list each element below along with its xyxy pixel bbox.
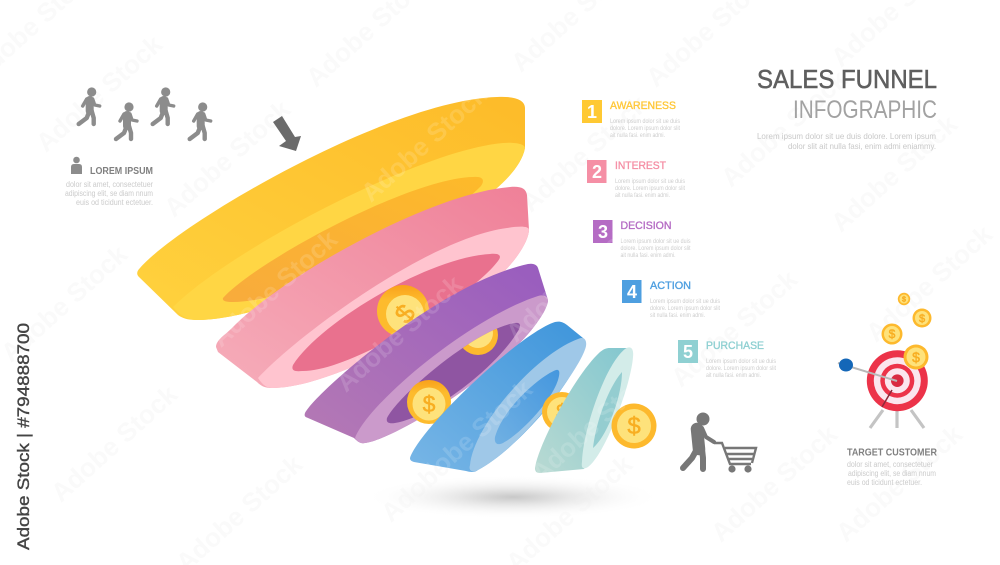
block: lorem ipsum <box>65 157 153 207</box>
title description: dolor slit ait nulla fasi, enim admi eniammy. <box>788 141 936 151</box>
title description <box>757 131 936 151</box>
step 3: decision <box>593 220 691 259</box>
step 5: purchase: ait nulla fasi. enim admi. <box>706 373 761 379</box>
coin 4: $ <box>912 349 920 365</box>
text: lorem ipsum description: adipiscing elit, se diam nnum <box>65 189 153 198</box>
coin in purple layer <box>462 328 498 355</box>
step 1: awareness: AWARENESS <box>610 100 676 112</box>
coin 3: $ <box>889 327 896 341</box>
step 4: action: sit nulla fasi. enim admi. <box>650 313 705 319</box>
title <box>757 64 937 124</box>
walker 4 <box>190 102 211 139</box>
step 5: purchase: Lorem ipsum dolor sit ue duis <box>706 359 776 365</box>
watermark on the white background: Adobe Stock <box>830 419 968 548</box>
step 3: decision: DECISION <box>620 220 672 232</box>
coin between purple and blue <box>407 380 451 424</box>
step 5: purchase: PURCHASE <box>706 340 764 352</box>
coin in pink layer: $ <box>389 299 421 329</box>
step 2: interest: 2 <box>592 162 602 182</box>
walker 1 <box>79 87 100 124</box>
watermark over the funnel: Adobe Stock <box>500 219 638 348</box>
block: target customer: dolor sit amet, consectetuer <box>847 460 933 469</box>
walker 3 <box>153 87 174 124</box>
watermark over the funnel: Adobe Stock <box>525 359 663 488</box>
step 4: action <box>622 280 720 319</box>
step 3: decision: Lorem ipsum dolor sit ue duis <box>620 239 690 245</box>
funnel layer 4: blue <box>410 322 586 472</box>
step 1: awareness: ait nulla fasi. enim admi. <box>610 133 665 139</box>
funnel <box>137 97 657 473</box>
step 3: decision: dolore. Lorem ipsum dolor slit <box>620 246 691 252</box>
title: INFOGRAPHIC <box>793 96 937 124</box>
text: lorem ipsum description: euis od ticidunt ectetuer. <box>76 198 153 207</box>
step 2: interest: INTEREST <box>615 160 666 172</box>
arrow into funnel <box>273 116 301 151</box>
watermark over the funnel: Adobe Stock <box>205 224 343 353</box>
step 4: action: Lorem ipsum dolor sit ue duis <box>650 299 720 305</box>
step 1: awareness <box>582 100 680 139</box>
coin 1: $ <box>902 296 906 304</box>
funnel layer 3: purple <box>305 264 548 443</box>
step 3: decision: 3 <box>598 222 608 242</box>
coin 2: $ <box>919 313 925 325</box>
title description: Lorem ipsum dolor sit ue duis dolore. Lorem ipsum <box>757 131 936 141</box>
icons: walking people <box>79 87 211 139</box>
watermark on the white background: Adobe Stock <box>860 219 998 348</box>
icon: person pushing shopping cart <box>683 412 756 473</box>
icon: target with dart and coins <box>838 293 932 428</box>
watermark over the funnel <box>205 79 663 503</box>
step 3: decision: ait nulla fasi. enim admi. <box>620 253 676 259</box>
block: target customer: TARGET CUSTOMER <box>847 448 938 458</box>
coin in pink layer <box>377 285 429 337</box>
watermark on the white background: Adobe Stock <box>375 399 513 528</box>
coin at funnel exit: $ <box>627 413 641 440</box>
block: target customer <box>847 448 938 487</box>
coin between blue and teal: $ <box>556 401 568 424</box>
watermark on the white background: Adobe Stock <box>158 94 296 223</box>
coin at funnel exit <box>612 404 656 448</box>
vertical stock id: Adobe Stock | #794888700 <box>14 323 33 550</box>
step 1: awareness: Lorem ipsum dolor sit ue duis <box>610 119 680 125</box>
block: target customer: adipiscing elit, se diam nnum <box>848 469 936 478</box>
watermark over the funnel: Adobe Stock <box>400 374 538 503</box>
ground shadow <box>363 475 663 519</box>
watermark on the white background: Adobe Stock <box>665 264 803 393</box>
step 5: purchase <box>678 340 776 379</box>
text: lorem ipsum description: dolor sit amet, consectetuer <box>66 180 153 189</box>
step 2: interest: ait nulla fasi. enim admi. <box>615 193 670 199</box>
watermark over the funnel: Adobe Stock <box>355 79 493 208</box>
step 4: action: ACTION <box>650 280 691 292</box>
watermark on the white background: Adobe Stock <box>715 64 853 193</box>
step 1: awareness: 1 <box>587 102 597 122</box>
heading: lorem ipsum: LOREM IPSUM <box>90 165 153 177</box>
coin between purple and blue: $ <box>423 391 436 417</box>
step 1: awareness: dolore. Lorem ipsum dolor slit <box>610 126 680 132</box>
block: target customer: euis od ticidunt ectetuer. <box>847 478 922 487</box>
step 4: action: dolore. Lorem ipsum dolor slit <box>650 306 720 312</box>
watermark on the white background: Adobe Stock <box>30 29 168 158</box>
watermark on the white background: Adobe Stock <box>45 379 183 508</box>
funnel layer 1: yellow <box>137 97 525 320</box>
step 2: interest: Lorem ipsum dolor sit ue duis <box>615 179 685 185</box>
watermark on the white background: Adobe Stock <box>705 419 843 548</box>
title: SALES FUNNEL <box>757 64 937 94</box>
coin between blue and teal <box>542 392 582 432</box>
text: lorem ipsum description <box>65 180 153 207</box>
funnel layer 2: pink <box>216 187 529 388</box>
step 2: interest: dolore. Lorem ipsum dolor slit <box>615 186 685 192</box>
watermark over the funnel: Adobe Stock <box>330 269 468 398</box>
watermark on the white background: Adobe Stock <box>825 109 963 238</box>
funnel layer 5: teal <box>535 347 633 473</box>
walker 2 <box>116 102 137 139</box>
step 5: purchase: 5 <box>683 342 693 362</box>
step 4: action: 4 <box>627 282 637 302</box>
step 5: purchase: dolore. Lorem ipsum dolor slit <box>706 366 776 372</box>
step 2: interest <box>587 160 685 199</box>
watermark on the white background: Adobe Stock <box>515 89 653 218</box>
icon: person <box>71 157 82 174</box>
